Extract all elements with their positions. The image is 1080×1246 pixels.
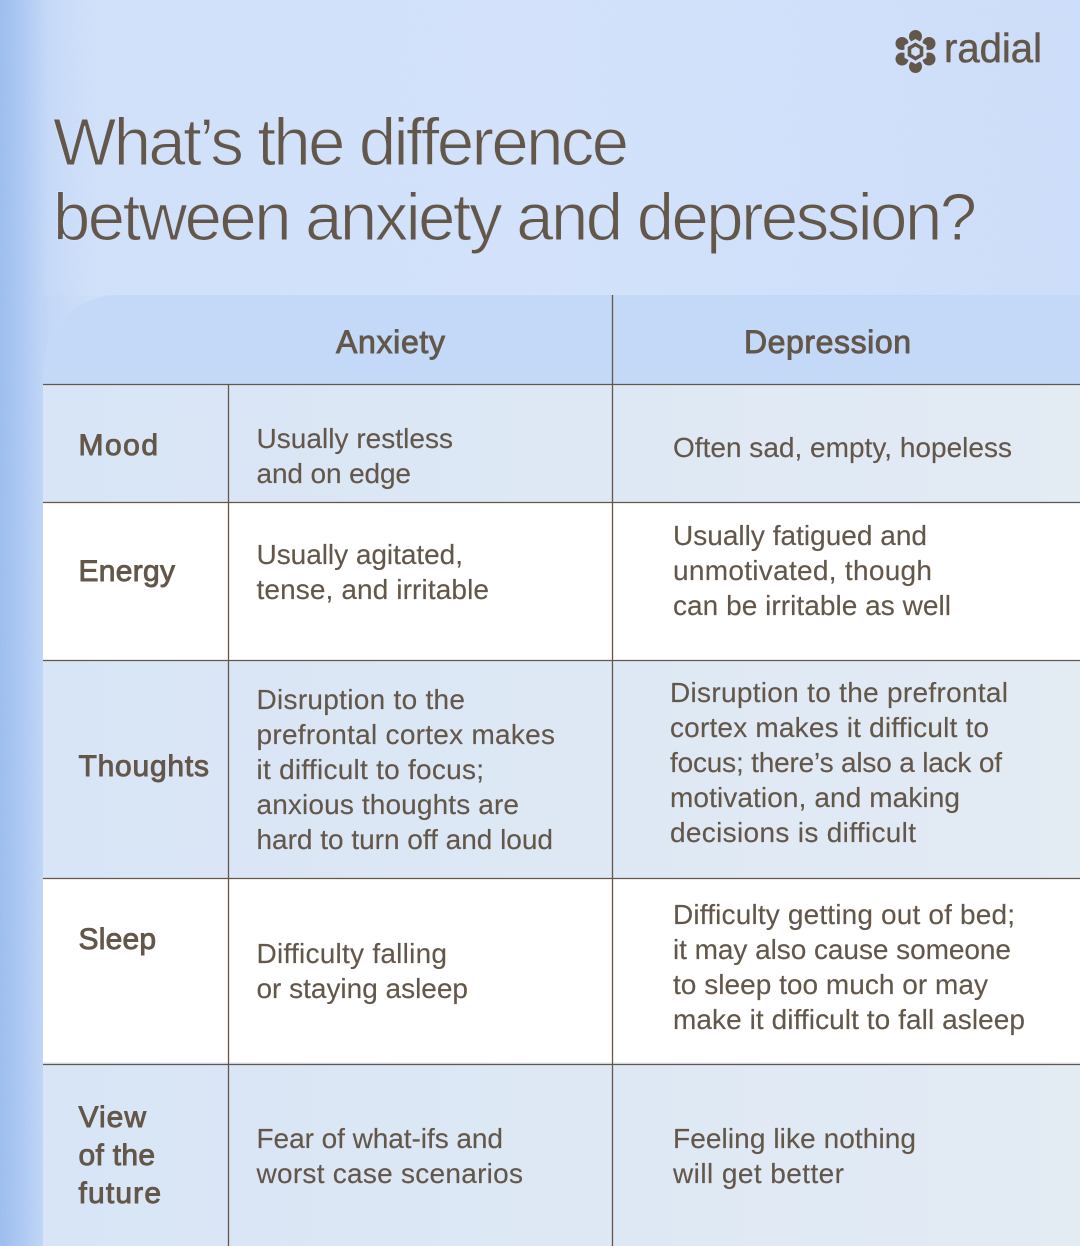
anxiety: energy <box>256 539 489 605</box>
anxiety: view of the future: Fear of what-ifs and <box>256 1123 503 1154</box>
depression: thoughts: cortex makes it difficult to <box>670 712 989 743</box>
depression: sleep: it may also cause someone <box>673 934 1011 965</box>
depression: energy <box>673 520 951 621</box>
anxiety: mood: Usually restless <box>256 423 453 454</box>
depression: thoughts: Disruption to the prefrontal <box>670 677 1008 708</box>
anxiety: energy: Usually agitated, <box>256 539 463 570</box>
depression: energy: Usually fatigued and <box>673 520 927 551</box>
logo: radial <box>896 25 1042 73</box>
label: Thoughts: Thoughts <box>78 750 209 783</box>
logo wordmark: radial <box>944 25 1042 71</box>
label: Mood: Mood <box>78 429 158 462</box>
anxiety: sleep: Difficulty falling <box>256 938 447 969</box>
anxiety: mood: and on edge <box>256 458 411 489</box>
title: What’s the difference <box>53 105 629 180</box>
label: View of the future <box>78 1101 161 1210</box>
anxiety: thoughts: anxious thoughts are <box>256 789 519 820</box>
anxiety: view of the future <box>256 1123 523 1189</box>
anxiety: energy: tense, and irritable <box>256 574 489 605</box>
row: Mood <box>43 384 1080 502</box>
anxiety: mood <box>256 423 453 489</box>
table <box>43 295 1080 1246</box>
depression: thoughts: motivation, and making <box>670 782 960 813</box>
depression: thoughts <box>670 677 1008 848</box>
column heading: Anxiety: Anxiety <box>336 324 445 360</box>
anxiety: sleep <box>256 938 468 1004</box>
depression: energy: can be irritable as well <box>673 590 951 621</box>
depression: view of the future <box>672 1123 916 1189</box>
row: View of the future <box>43 1062 1080 1246</box>
row: Sleep <box>43 878 1080 1064</box>
column heading: Depression: Depression <box>744 324 911 360</box>
anxiety: thoughts <box>256 684 555 855</box>
depression: sleep: to sleep too much or may <box>673 969 988 1000</box>
depression: view of the future: Feeling like nothing <box>673 1123 916 1154</box>
label: View of the future: View <box>78 1101 146 1134</box>
depression: mood: Often sad, empty, hopeless <box>673 432 1012 463</box>
depression: energy: unmotivated, though <box>673 555 932 586</box>
header row <box>43 295 1080 384</box>
depression: view of the future: will get better <box>672 1158 844 1189</box>
depression: thoughts: focus; there’s also a lack of <box>670 747 1002 778</box>
title <box>53 105 977 255</box>
icon: flower mark <box>896 30 936 73</box>
label: View of the future: of the <box>78 1139 155 1172</box>
row: Energy <box>43 502 1080 660</box>
title: between anxiety and depression? <box>53 180 977 255</box>
depression: sleep: Difficulty getting out of bed; <box>673 899 1015 930</box>
anxiety: view of the future: worst case scenarios <box>256 1158 523 1189</box>
label: View of the future: future <box>78 1177 161 1210</box>
depression: sleep: make it difficult to fall asleep <box>673 1004 1025 1035</box>
row: Thoughts <box>43 660 1080 878</box>
depression: sleep <box>673 899 1025 1035</box>
anxiety: thoughts: prefrontal cortex makes <box>256 719 555 750</box>
anxiety: sleep: or staying asleep <box>256 973 468 1004</box>
anxiety: thoughts: Disruption to the <box>256 684 465 715</box>
anxiety: thoughts: it difficult to focus; <box>256 754 484 785</box>
depression: thoughts: decisions is difficult <box>670 817 916 848</box>
label: Energy: Energy <box>78 555 175 588</box>
anxiety: thoughts: hard to turn off and loud <box>256 824 553 855</box>
label: Sleep: Sleep <box>78 923 156 956</box>
